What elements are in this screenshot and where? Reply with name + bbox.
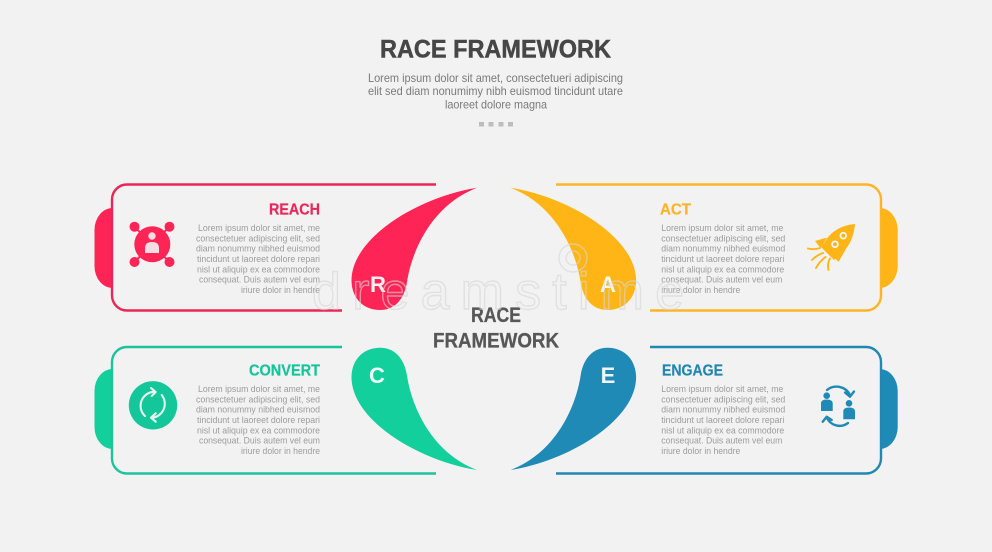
convert tab [94, 369, 113, 449]
convert body text [196, 383, 320, 456]
center label [433, 304, 559, 352]
engage body text: consequat. Duis autem vel eum [661, 435, 782, 446]
center label: FRAMEWORK [433, 329, 559, 352]
reach body text [196, 222, 320, 295]
engage body text: Lorem ipsum dolor sit amet, me [661, 383, 783, 394]
act tab [880, 208, 898, 288]
reach body text: diam nonummy nibhed euismod [196, 243, 320, 254]
act body text: iriure dolor in hendre [661, 284, 740, 295]
convert body text: nisl ut aliquip ex ea commodore [197, 424, 320, 435]
icon: connected person [130, 222, 174, 267]
letter R: R [370, 272, 386, 297]
letter A: A [600, 272, 616, 297]
act body text [661, 222, 785, 295]
reach body text: Lorem ipsum dolor sit amet, me [198, 222, 320, 233]
convert body text: iriure dolor in hendre [241, 445, 320, 456]
engage outline [556, 347, 881, 474]
engage body text: consectetuer adipiscing elit, sed [661, 393, 785, 404]
drop: E [511, 348, 636, 470]
letter E: E [601, 363, 615, 388]
title: RACE FRAMEWORK [380, 35, 611, 63]
convert body text: consequat. Duis autem vel eum [199, 435, 320, 446]
subtitle text: elit sed diam nonumimy nibh euismod tincidunt utare [368, 84, 623, 98]
convert body text: consectetuer adipiscing elit, sed [196, 393, 320, 404]
icon: refresh [129, 381, 177, 429]
reach heading: REACH [269, 201, 320, 218]
reach body text: tincidunt ut laoreet dolore repari [197, 253, 320, 264]
act body text: consectetuer adipiscing elit, sed [661, 232, 785, 243]
engage body text: iriure dolor in hendre [661, 445, 740, 456]
convert outline [112, 347, 436, 474]
convert heading: CONVERT [249, 363, 320, 380]
reach tab [94, 208, 113, 288]
subtitle text: laoreet dolore magna [445, 97, 547, 111]
icon: rocket [808, 224, 855, 270]
engage body text: tincidunt ut laoreet dolore repari [661, 414, 784, 425]
act heading: ACT [660, 201, 692, 218]
act body text: Lorem ipsum dolor sit amet, me [661, 222, 783, 233]
subtitle text: Lorem ipsum dolor sit amet, consectetueri adipiscing [368, 71, 623, 85]
subtitle text [368, 71, 623, 111]
drop: R [351, 188, 477, 310]
engage body text: nisl ut aliquip ex ea commodore [661, 424, 784, 435]
reach body text: nisl ut aliquip ex ea commodore [197, 263, 320, 274]
reach outline [112, 184, 436, 310]
convert body text: diam nonummy nibhed euismod [196, 404, 320, 415]
panel: act [556, 184, 898, 310]
drop: C [351, 348, 477, 470]
reach body text: iriure dolor in hendre [241, 284, 320, 295]
engage body text [661, 383, 785, 456]
center label: RACE [471, 304, 521, 327]
panel: convert [94, 347, 436, 474]
engage heading: ENGAGE [662, 363, 723, 380]
icon: people exchange [821, 387, 855, 426]
letter C: C [369, 363, 385, 388]
panel: reach [94, 184, 436, 310]
act body text: nisl ut aliquip ex ea commodore [661, 263, 784, 274]
watermark: dreamstime [312, 263, 684, 321]
act body text: diam nonummy nibhed euismod [661, 243, 785, 254]
pagination dots [479, 122, 513, 126]
panel: engage [556, 347, 898, 474]
reach body text: consequat. Duis autem vel eum [199, 274, 320, 285]
engage body text: diam nonummy nibhed euismod [661, 404, 785, 415]
reach body text: consectetuer adipiscing elit, sed [196, 232, 320, 243]
act body text: tincidunt ut laoreet dolore repari [661, 253, 784, 264]
convert body text: Lorem ipsum dolor sit amet, me [198, 383, 320, 394]
drop: A [511, 188, 636, 310]
act outline [556, 184, 881, 310]
act body text: consequat. Duis autem vel eum [661, 274, 782, 285]
engage tab [880, 369, 898, 449]
convert body text: tincidunt ut laoreet dolore repari [197, 414, 320, 425]
